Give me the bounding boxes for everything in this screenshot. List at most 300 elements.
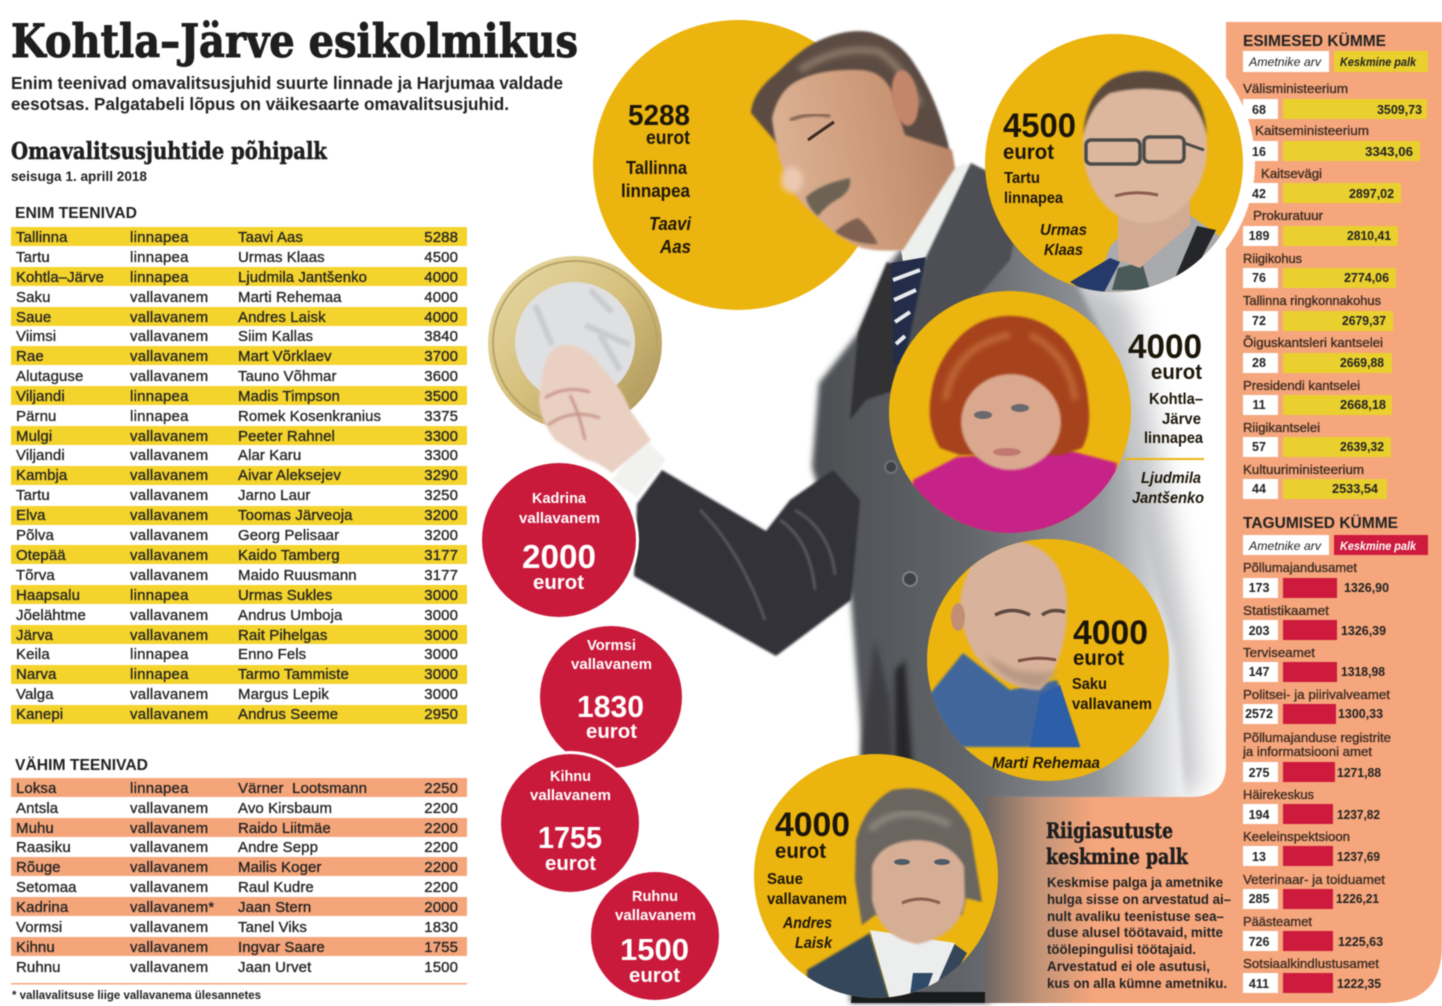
circle: Kadrina 2000: 2000	[522, 538, 596, 575]
table: lowest earners: Jaan Stern	[238, 899, 311, 916]
table: top earners: Mulgi	[16, 428, 52, 445]
table: lowest earners: 1755	[424, 939, 458, 956]
photo: Marti Rehemaa	[925, 540, 1080, 747]
table: lowest earners: 1830	[424, 919, 458, 936]
table: top earners: 3500	[424, 388, 458, 405]
photo: Taavi Aas suit torso	[812, 168, 1200, 1003]
text block: salary explanation: nult avaliku teenistuse sea–	[1047, 909, 1224, 924]
chart: first ten agencies: Tallinna ringkonnakohus	[1243, 294, 1381, 308]
table: top earners: 3000	[424, 627, 458, 644]
table: top earners: Pärnu	[16, 408, 56, 425]
table: lowest earners: Ingvar Saare	[238, 939, 325, 956]
heading: first ten: ESIMESED KÜMME	[1243, 33, 1386, 50]
table: top earners: Viljandi	[16, 447, 65, 464]
chart: first ten agencies: Prokuratuur	[1253, 209, 1323, 223]
chart: last ten agencies: 203	[1249, 624, 1269, 638]
table: lowest earners: Kadrina	[16, 899, 69, 916]
white ring around Tartu circle	[1225, 77, 1256, 249]
table: top earners: Rait Pihelgas	[238, 627, 327, 644]
table: top earners: Urmas Sukles	[238, 587, 332, 604]
table: top earners: Andrus Seeme	[238, 706, 338, 723]
table: lowest earners: 2200	[424, 859, 458, 876]
chart: last ten agencies: Statistikaamet	[1243, 604, 1330, 618]
table: lowest earners: Setomaa	[16, 879, 77, 896]
table: lowest earners: 2000	[424, 899, 458, 916]
circle: Saku, Marti Rehemaa: eurot	[1073, 647, 1124, 670]
table: top earners: Haapsalu	[16, 587, 80, 604]
table: top earners: Aivar Aleksejev	[238, 467, 341, 484]
chart: first ten agencies: Riigikantselei	[1243, 421, 1320, 435]
chart: last ten agencies: 173	[1249, 581, 1269, 595]
circle: Kohtla-Järve, Ljudmila Jantšenko: linnapea	[1144, 430, 1203, 447]
table: top earners: Mart Võrklaev	[238, 348, 332, 365]
chart: first ten agencies: 57	[1252, 440, 1266, 454]
chart: first ten agencies: 76	[1252, 271, 1266, 285]
chart: last ten agencies: 1326,39	[1341, 624, 1386, 638]
table: top earners: Romek Kosenkranius	[238, 408, 381, 425]
table: top earners: 4500	[424, 249, 458, 266]
chart: last ten agencies: Keeleinspektsioon	[1243, 830, 1350, 844]
table: top earners: vallavanem	[130, 607, 208, 624]
table: top earners: Tarmo Tammiste	[238, 666, 349, 683]
chart: first ten agencies: 42	[1252, 187, 1266, 201]
table: top earners: 3177	[424, 547, 458, 564]
table: top earners: Taavi Aas	[238, 229, 303, 246]
intro text: Enim teenivad omavalitsusjuhid suurte linnade ja Harjumaa valdade	[11, 73, 563, 93]
table: top earners: vallavanem	[130, 309, 208, 326]
text block: salary explanation: Arvestatud ei ole asutusi,	[1047, 959, 1210, 974]
table: top earners: Maido Ruusmann	[238, 567, 357, 584]
table: top earners: Alutaguse	[16, 368, 83, 385]
chart: first ten agencies: Õiguskantsleri kantselei	[1243, 335, 1383, 350]
circle: Saue, Andres Laisk: eurot	[775, 840, 826, 863]
table: top earners: Viimsi	[16, 328, 56, 345]
circle: Kihnu 1755	[498, 751, 642, 895]
table: top earners: Tallinna	[16, 229, 68, 246]
text block: salary explanation: Keskmise palga ja ametnike	[1047, 875, 1223, 890]
chart: first ten agencies: 3343,06	[1365, 145, 1413, 159]
table: top earners: linnapea	[130, 408, 189, 425]
table: top earners: linnapea	[130, 666, 189, 683]
table: top earners: Marti Rehemaa	[238, 289, 342, 306]
circle: Kohtla-Järve, Ljudmila Jantšenko: Jantšenko	[1132, 490, 1204, 507]
chart: first ten agencies: Riigikohus	[1243, 252, 1302, 266]
chart: last ten agencies: Põllumajandusamet	[1243, 561, 1358, 575]
table: top earners: vallavanem	[130, 289, 208, 306]
circle: Tartu, Urmas Klaas	[985, 34, 1243, 300]
table: top earners: linnapea	[130, 249, 189, 266]
table: top earners: 4000	[424, 309, 458, 326]
table: lowest earners: Ruhnu	[16, 959, 61, 976]
table: lowest earners: Vormsi	[16, 919, 62, 936]
chart: first ten agencies: Kultuuriministeerium	[1243, 463, 1364, 477]
table: top earners: Kohtla–Järve	[16, 269, 104, 286]
chart: last ten agencies: 147	[1249, 665, 1269, 679]
legend: red: Keskmine palk	[1340, 541, 1417, 553]
table: top earners: 3000	[424, 646, 458, 663]
chart: first ten agencies: 2668,18	[1340, 398, 1386, 412]
legend: yellow: Keskmine palk	[1340, 57, 1417, 69]
table: lowest earners	[11, 778, 467, 984]
table: top earners: vallavanem	[130, 706, 208, 723]
table: top earners: Valga	[16, 686, 54, 703]
table: top earners: vallavanem	[130, 686, 208, 703]
table: top earners: Enno Fels	[238, 646, 306, 663]
chart: first ten agencies: 2774,06	[1344, 271, 1389, 285]
circle: Kohtla-Järve, Ljudmila Jantšenko: eurot	[1151, 361, 1202, 384]
circle: Saku, Marti Rehemaa: Saku	[1072, 676, 1107, 693]
chart: first ten agencies: 28	[1252, 356, 1266, 370]
circle: Ruhnu 1500: vallavanem	[615, 907, 696, 924]
title: Kohtla–Järve esikolmikus	[11, 14, 578, 68]
table: lowest earners: Loksa	[16, 780, 57, 797]
circle: Saue, Andres Laisk: Laisk	[795, 935, 833, 952]
chart: last ten agencies: 1300,33	[1338, 707, 1383, 721]
photo: Taavi Aas head and collar	[751, 31, 1025, 420]
table: top earners: vallavanem	[130, 368, 208, 385]
circle: Saue, Andres Laisk: vallavanem	[767, 891, 847, 908]
chart: first ten agencies: 16	[1252, 145, 1266, 159]
text block: salary explanation	[1047, 875, 1231, 991]
circle: Tallinn text	[621, 100, 692, 257]
chart: first ten agencies: 2679,37	[1342, 314, 1386, 328]
table: top earners: 3000	[424, 686, 458, 703]
circle: Kihnu 1755: 1755	[538, 820, 602, 855]
circle: Kihnu 1755: eurot	[545, 853, 596, 875]
text block: salary explanation: hulga sisse on arvestatud ai–	[1047, 892, 1231, 907]
table: top earners: linnapea	[130, 646, 189, 663]
table: top earners: 3177	[424, 567, 458, 584]
table: top earners: Siim Kallas	[238, 328, 313, 345]
text block: salary explanation: töölepingulisi töötajaid.	[1047, 942, 1196, 957]
table: top earners: Alar Karu	[238, 447, 301, 464]
table: top earners: 3840	[424, 328, 458, 345]
chart: last ten agencies: 1237,69	[1337, 850, 1380, 864]
table: top earners: Andres Laisk	[238, 309, 326, 326]
circle: Kohtla-Järve, Ljudmila Jantšenko: Ljudmila	[1141, 470, 1201, 487]
table: top earners: Kanepi	[16, 706, 63, 723]
table: lowest earners: 2200	[424, 879, 458, 896]
circle: Tartu, Urmas Klaas: eurot	[1003, 141, 1054, 164]
table: top earners: Tauno Võhmar	[238, 368, 337, 385]
table: lowest earners: Jaan Urvet	[238, 959, 312, 976]
table: top earners: linnapea	[130, 229, 189, 246]
table: lowest earners: 1500	[424, 959, 458, 976]
table: top earners: Järva	[16, 627, 54, 644]
table: top earners: Ljudmila Jantšenko	[238, 269, 367, 286]
legend: red	[1243, 535, 1428, 555]
chart: last ten agencies: 411	[1249, 977, 1269, 991]
table: top earners: 3200	[424, 527, 458, 544]
circle: Saue, Andres Laisk: Andres	[782, 915, 832, 932]
circle: Saue, Andres Laisk: Saue	[767, 871, 803, 888]
legend: red: Ametnike arv	[1248, 541, 1322, 553]
table: lowest earners: Mailis Koger	[238, 859, 322, 876]
circle: Vormsi 1830: vallavanem	[571, 656, 652, 673]
circle: Vormsi 1830	[540, 626, 682, 768]
table: lowest earners: Raasiku	[16, 839, 71, 856]
chart: first ten agencies: 189	[1249, 229, 1269, 243]
circle: Tallinn text: Aas	[659, 237, 691, 257]
chart: first ten agencies: 2669,88	[1340, 356, 1384, 370]
chart: last ten agencies: Terviseamet	[1243, 646, 1316, 660]
table: top earners: vallavanem	[130, 447, 208, 464]
table: top earners: Saue	[16, 309, 51, 326]
circle: Saue, Andres Laisk	[754, 754, 998, 1000]
table: top earners: Peeter Rahnel	[238, 428, 335, 445]
table: top earners: 3290	[424, 467, 458, 484]
photo: hand fist	[539, 345, 651, 473]
panel: orange state agencies background	[985, 22, 1442, 1003]
table: lowest earners: 2200	[424, 839, 458, 856]
table: lowest earners: vallavanem	[130, 859, 208, 876]
circle: Kadrina 2000	[479, 460, 639, 620]
chart: last ten agencies: 1225,63	[1338, 935, 1383, 949]
chart: first ten agencies: 2639,32	[1340, 440, 1384, 454]
circle: Vormsi 1830: Vormsi	[587, 637, 636, 654]
intro text	[11, 73, 563, 114]
table: top earners: linnapea	[130, 269, 189, 286]
table: top earners: Jarno Laur	[238, 487, 311, 504]
table: lowest earners: vallavanem*	[130, 899, 214, 916]
table: lowest earners: Rõuge	[16, 859, 61, 876]
circle: Kadrina 2000: eurot	[533, 572, 584, 594]
table date: seisuga 1. aprill 2018	[11, 168, 147, 184]
photo: Ljudmila Jantšenko	[913, 316, 1117, 540]
table: top earners: 3375	[424, 408, 458, 425]
table: top earners: Keila	[16, 646, 50, 663]
circle: Saku, Marti Rehemaa: vallavanem	[1072, 696, 1152, 713]
chart: last ten agencies: 13	[1252, 850, 1266, 864]
chart: last ten agencies: 275	[1249, 766, 1269, 780]
table: lowest earners: 2200	[424, 800, 458, 817]
table: top earners: Madis Timpson	[238, 388, 340, 405]
circle: Ruhnu 1500: Ruhnu	[632, 888, 678, 905]
table: top earners: Saku	[16, 289, 51, 306]
chart: first ten agencies: 72	[1252, 314, 1266, 328]
heading: state agencies average salary: keskmine palk	[1046, 844, 1188, 869]
circle: Tallinn background	[593, 20, 883, 310]
circle: Kohtla-Järve, Ljudmila Jantšenko: Kohtla–	[1149, 391, 1203, 408]
table: lowest earners: Andre Sepp	[238, 839, 318, 856]
circle: Kihnu 1755: vallavanem	[530, 787, 611, 804]
table: top earners: 3300	[424, 428, 458, 445]
chart: last ten agencies: 194	[1249, 808, 1269, 822]
table: lowest earners: vallavanem	[130, 919, 208, 936]
chart: first ten agencies: Välisministeerium	[1243, 82, 1348, 96]
table: top earners: Tartu	[16, 249, 50, 266]
chart: last ten agencies: ja informatsiooni amet	[1242, 745, 1373, 759]
table: top earners: vallavanem	[130, 487, 208, 504]
table: top earners: Tartu	[16, 487, 50, 504]
table: top earners: vallavanem	[130, 547, 208, 564]
table: top earners: Georg Pelisaar	[238, 527, 339, 544]
circle: Tartu, Urmas Klaas: linnapea	[1004, 190, 1063, 207]
heading: last ten: TAGUMISED KÜMME	[1243, 515, 1398, 532]
table: top earners: vallavanem	[130, 527, 208, 544]
table: top earners: linnapea	[130, 388, 189, 405]
chart: first ten agencies: Presidendi kantselei	[1243, 379, 1360, 393]
table: top earners: Toomas Järveoja	[238, 507, 353, 524]
table: lowest earners: Raido Liitmäe	[238, 820, 331, 837]
chart: last ten agencies: Häirekeskus	[1243, 788, 1314, 802]
chart: last ten agencies: Politsei- ja piirivalveamet	[1243, 688, 1391, 702]
chart: last ten agencies: 2572	[1245, 707, 1273, 721]
text block: salary explanation: duse alusel töötavaid, mitte	[1047, 925, 1223, 940]
coin	[488, 256, 662, 430]
table: top earners: vallavanem	[130, 428, 208, 445]
table: lowest earners: 2200	[424, 820, 458, 837]
chart: first ten agencies: 2533,54	[1332, 482, 1378, 496]
table: top earners: Kambja	[16, 467, 68, 484]
table: top earners: 3250	[424, 487, 458, 504]
chart: first ten agencies: 68	[1252, 103, 1266, 117]
circle: Kihnu 1755: Kihnu	[550, 768, 591, 785]
table: top earners: 3000	[424, 607, 458, 624]
table: lowest earners: vallavanem	[130, 939, 208, 956]
circle: Ruhnu 1500: 1500	[620, 932, 689, 967]
circle: Tallinn text: Taavi	[649, 214, 692, 234]
table: top earners: vallavanem	[130, 348, 208, 365]
circle: Saku, Marti Rehemaa: 4000	[1073, 614, 1148, 652]
table: lowest earners: Värner Lootsmann	[238, 780, 367, 797]
table: top earners: 4000	[424, 289, 458, 306]
chart: last ten agencies	[1242, 515, 1428, 993]
table: top earners: Tõrva	[16, 567, 55, 584]
legend: yellow: Ametnike arv	[1248, 57, 1322, 69]
circle: Tartu, Urmas Klaas: Klaas	[1044, 242, 1083, 259]
circle: Ruhnu 1500	[591, 872, 719, 1000]
table: top earners: Põlva	[16, 527, 54, 544]
table: top earners: 3200	[424, 507, 458, 524]
table: top earners: 3000	[424, 666, 458, 683]
table: top earners: Narva	[16, 666, 57, 683]
chart: first ten agencies: 44	[1252, 482, 1266, 496]
table: top earners: Rae	[16, 348, 44, 365]
chart: last ten agencies: Veterinaar- ja toiduamet	[1243, 873, 1386, 887]
chart: first ten agencies: 11	[1252, 398, 1266, 412]
table: top earners: 3000	[424, 587, 458, 604]
circle: Saue, Andres Laisk: 4000	[775, 806, 850, 844]
circle: Tallinn text: eurot	[646, 128, 691, 149]
circle: Kadrina 2000: vallavanem	[519, 510, 600, 527]
circle: Vormsi 1830: eurot	[586, 721, 637, 743]
table: lowest earners: vallavanem	[130, 959, 208, 976]
table: lowest earners: Antsla	[16, 800, 59, 817]
circle: Vormsi 1830: 1830	[577, 689, 644, 724]
chart: last ten agencies: Põllumajanduse registrite	[1243, 731, 1391, 745]
circle: Kohtla-Järve, Ljudmila Jantšenko: 4000	[1128, 328, 1202, 366]
heading: state agencies average salary: Riigiasutuste	[1046, 818, 1173, 843]
table: lowest earners: Kihnu	[16, 939, 55, 956]
circle: Tartu, Urmas Klaas: Urmas	[1040, 222, 1087, 239]
table: top earners: 2950	[424, 706, 458, 723]
table heading: Omavalitsusjuhtide põhipalk	[11, 138, 328, 165]
table: lowest earners: Muhu	[16, 820, 54, 837]
footnote: * vallavalitsuse liige vallavanema ülesannetes	[12, 988, 261, 1002]
table: lowest earners: vallavanem	[130, 879, 208, 896]
circle: Kadrina 2000: Kadrina	[532, 490, 587, 507]
table: lowest earners: 2250	[424, 780, 458, 797]
heading: top earners: ENIM TEENIVAD	[15, 205, 137, 222]
chart: last ten agencies: 1222,35	[1337, 977, 1381, 991]
table: top earners: vallavanem	[130, 627, 208, 644]
circle: Kohtla-Järve, Ljudmila Jantšenko	[889, 291, 1204, 540]
table: top earners: 3300	[424, 447, 458, 464]
chart: first ten agencies: 3509,73	[1377, 103, 1422, 117]
table: top earners: linnapea	[130, 587, 189, 604]
chart: first ten agencies	[1243, 33, 1428, 499]
circle: Tallinn text: 5288	[628, 100, 690, 132]
chart: first ten agencies: Kaitsevägi	[1261, 167, 1322, 181]
chart: last ten agencies: 1318,98	[1341, 665, 1385, 679]
table: top earners: 3700	[424, 348, 458, 365]
circle: Tallinn text: linnapea	[621, 181, 691, 201]
photo: Urmas Klaas	[1070, 71, 1225, 300]
table: top earners: Andrus Umboja	[238, 607, 343, 624]
chart: last ten agencies: 726	[1249, 935, 1269, 949]
chart: first ten agencies: 2810,41	[1347, 229, 1391, 243]
text block: salary explanation: kus on alla kümne ametniku.	[1047, 976, 1227, 991]
table: top earners: Margus Lepik	[238, 686, 329, 703]
chart: first ten agencies: 2897,02	[1349, 187, 1394, 201]
table: top earners: Urmas Klaas	[238, 249, 325, 266]
intro text: eesotsas. Palgatabeli lõpus on väikesaarte omavalitsusjuhid.	[11, 94, 509, 114]
table: lowest earners: vallavanem	[130, 839, 208, 856]
table: top earners: 3600	[424, 368, 458, 385]
circle: Tartu, Urmas Klaas: 4500	[1003, 107, 1076, 145]
heading: state agencies average salary	[1046, 818, 1188, 869]
table: top earners: vallavanem	[130, 507, 208, 524]
jacket buttons	[885, 461, 917, 586]
table: lowest earners: Tanel Viks	[238, 919, 307, 936]
table: top earners: 4000	[424, 269, 458, 286]
table: top earners: Elva	[16, 507, 46, 524]
table: top earners: 5288	[424, 229, 458, 246]
table: lowest earners: vallavanem	[130, 820, 208, 837]
heading: lowest earners: VÄHIM TEENIVAD	[15, 757, 148, 774]
circle: Saku, Marti Rehemaa: Marti Rehemaa	[992, 755, 1100, 772]
circle: Kohtla-Järve, Ljudmila Jantšenko: Järve	[1162, 411, 1201, 428]
table: top earners: vallavanem	[130, 328, 208, 345]
circle: Tartu, Urmas Klaas: Tartu	[1004, 170, 1040, 187]
circle: Saku, Marti Rehemaa	[925, 539, 1169, 781]
chart: last ten agencies: Päästeamet	[1243, 915, 1313, 929]
table: lowest earners: linnapea	[130, 780, 189, 797]
table: top earners: Viljandi	[16, 388, 65, 405]
table: top earners: Kaido Tamberg	[238, 547, 340, 564]
circle: Tallinn text: Tallinna	[626, 158, 688, 178]
chart: last ten agencies: 285	[1249, 892, 1269, 906]
chart: last ten agencies: 1237,82	[1337, 808, 1380, 822]
circle: Ruhnu 1500: eurot	[629, 965, 680, 987]
photo: suit sleeve	[634, 470, 860, 656]
table: top earners	[11, 227, 467, 724]
table: lowest earners: Avo Kirsbaum	[238, 800, 332, 817]
legend: yellow	[1243, 51, 1428, 72]
table: lowest earners: Raul Kudre	[238, 879, 314, 896]
photo: Andres Laisk	[807, 788, 982, 1000]
table: top earners: vallavanem	[130, 467, 208, 484]
chart: last ten agencies: 1271,88	[1337, 766, 1381, 780]
table: lowest earners: vallavanem	[130, 800, 208, 817]
chart: last ten agencies: 1326,90	[1344, 581, 1389, 595]
chart: last ten agencies: Sotsiaalkindlustusamet	[1243, 957, 1380, 971]
table: top earners: Otepää	[16, 547, 66, 564]
chart: last ten agencies: 1226,21	[1336, 892, 1379, 906]
table: top earners: Jõelähtme	[16, 607, 86, 624]
chart: first ten agencies: Kaitseministeerium	[1255, 124, 1369, 138]
